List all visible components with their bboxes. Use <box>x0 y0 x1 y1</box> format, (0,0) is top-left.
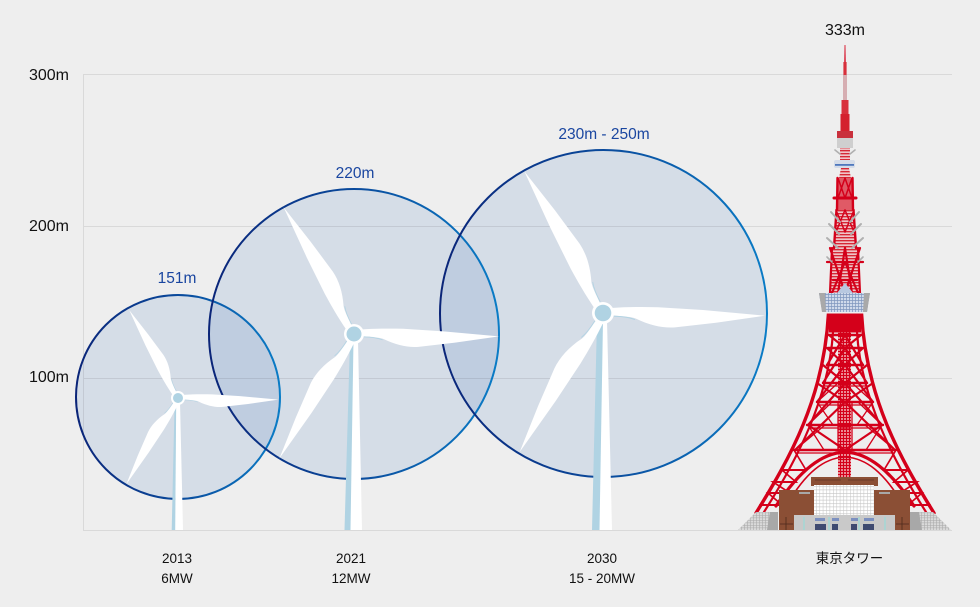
rotor diameter labels: 151m <box>158 270 196 287</box>
x-axis captions: 東京タワー <box>816 551 883 566</box>
rotor diameter labels: 230m - 250m <box>558 126 650 143</box>
x-axis captions: 2021 <box>336 551 366 566</box>
antenna <box>834 45 855 178</box>
observation deck <box>819 283 870 332</box>
turbine 2021 <box>270 202 499 530</box>
x-axis captions: 12MW <box>331 571 371 586</box>
x-axis captions: 2013 <box>162 551 192 566</box>
rotor swept areas <box>76 150 767 499</box>
tower height label: 333m <box>825 22 865 39</box>
y-axis labels: 200m <box>29 218 69 235</box>
y-axis labels: 300m <box>29 67 69 84</box>
Tokyo Tower <box>738 22 951 530</box>
turbine 2030 <box>509 165 765 530</box>
x-axis captions: 6MW <box>161 571 193 586</box>
rotor diameter labels: 220m <box>336 165 374 182</box>
ground plaza <box>738 512 951 530</box>
turbine 2013 <box>120 307 278 530</box>
tower upper body <box>830 178 860 293</box>
y-axis labels: 100m <box>29 369 69 386</box>
x-axis captions: 2030 <box>587 551 617 566</box>
x-axis captions <box>161 551 883 586</box>
rotor diameter labels <box>158 126 650 287</box>
y-axis labels <box>29 67 69 386</box>
foot tower building <box>779 477 910 530</box>
x-axis captions: 15 - 20MW <box>569 571 635 586</box>
chart grid and axes <box>83 74 952 531</box>
tower lattice legs <box>756 150 934 513</box>
central shaft <box>838 332 851 478</box>
